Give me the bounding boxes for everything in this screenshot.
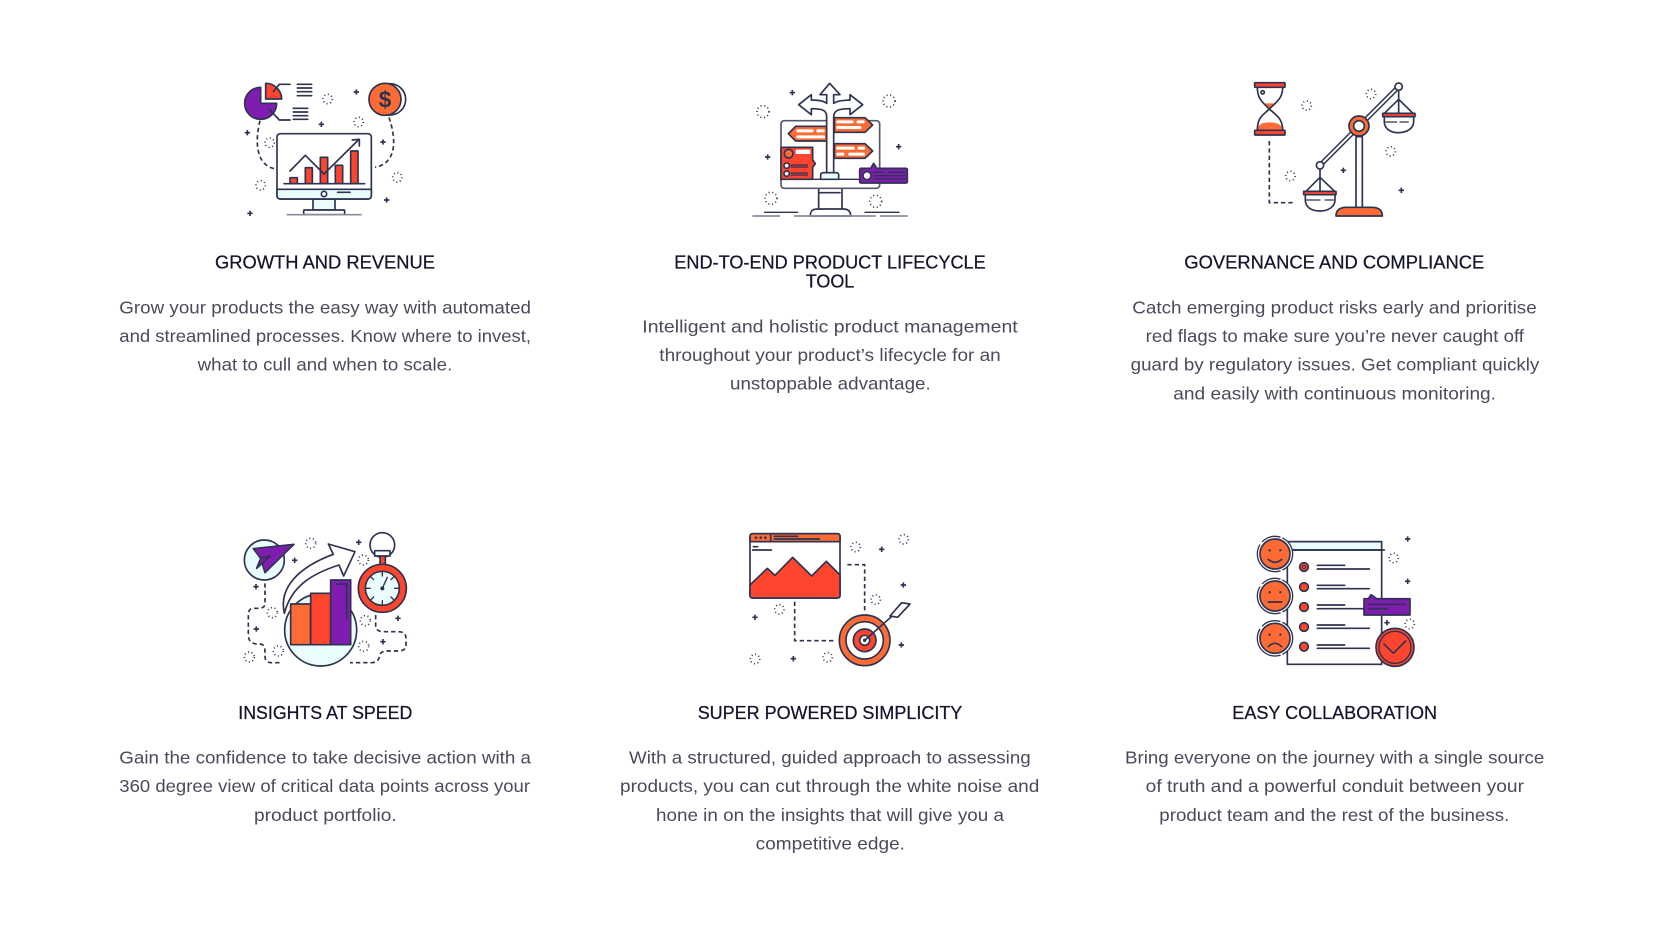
hourglass bbox=[1255, 83, 1285, 135]
body text: and streamlined processes. Know where to invest, bbox=[119, 326, 531, 346]
neutral face bbox=[1257, 578, 1293, 614]
body text: unstoppable advantage. bbox=[730, 374, 931, 394]
body text: Catch emerging product risks early and prioritise bbox=[1132, 297, 1537, 317]
heading: SUPER POWERED SIMPLICITY bbox=[698, 703, 962, 723]
icon: monitor with signpost bbox=[752, 83, 908, 216]
stopwatch bbox=[358, 533, 406, 612]
body text: and easily with continuous monitoring. bbox=[1173, 384, 1496, 404]
body text: competitive edge. bbox=[756, 834, 905, 854]
heading: GROWTH AND REVENUE bbox=[215, 252, 435, 272]
monitor bbox=[752, 121, 908, 216]
monitor bbox=[277, 134, 371, 215]
check badge bbox=[1376, 628, 1414, 666]
heading: INSIGHTS AT SPEED bbox=[238, 703, 412, 723]
balance scale bbox=[1304, 83, 1415, 216]
body text bbox=[1131, 297, 1540, 404]
heading: EASY COLLABORATION bbox=[1232, 703, 1437, 723]
body text: hone in on the insights that will give you a bbox=[656, 805, 1004, 825]
panel: super powered simplicity bbox=[620, 534, 1039, 854]
body text: Bring everyone on the journey with a single source bbox=[1125, 747, 1544, 767]
body text bbox=[620, 747, 1039, 854]
profile card bbox=[781, 147, 815, 179]
chat bubble bbox=[860, 163, 907, 183]
panel: end-to-end product lifecycle tool bbox=[642, 83, 1018, 394]
target and arrow bbox=[839, 603, 910, 666]
sad face bbox=[1257, 621, 1293, 656]
panel: easy collaboration bbox=[1125, 536, 1544, 825]
body text: Grow your products the easy way with automated bbox=[119, 297, 531, 317]
panel: growth and revenue bbox=[119, 83, 531, 375]
heading: TOOL bbox=[806, 271, 854, 291]
body text bbox=[642, 316, 1018, 394]
body text: products, you can cut through the white noise and bbox=[620, 776, 1039, 796]
browser window bbox=[750, 534, 840, 598]
body text: of truth and a powerful conduit between your bbox=[1146, 776, 1524, 796]
body text: guard by regulatory issues. Get compliant quickly bbox=[1131, 355, 1540, 375]
body text bbox=[119, 297, 531, 375]
body text: product portfolio. bbox=[254, 805, 397, 825]
icon: monitor with growth chart, pie and coin bbox=[245, 83, 406, 216]
paper plane badge bbox=[244, 540, 294, 580]
body text: With a structured, guided approach to assessing bbox=[629, 747, 1031, 767]
icon: bars, paper plane and stopwatch bbox=[244, 533, 406, 666]
body text bbox=[1125, 747, 1544, 825]
body text: red flags to make sure you’re never caught off bbox=[1146, 326, 1524, 346]
body text: product team and the rest of the business. bbox=[1159, 805, 1509, 825]
direction signs bbox=[788, 118, 873, 158]
icon: dollar coin: $ bbox=[379, 86, 392, 112]
icon: hourglass and scales bbox=[1255, 83, 1415, 216]
bar chart with arrow bbox=[283, 544, 357, 666]
icon: dollar coin bbox=[369, 83, 406, 115]
chat bubble bbox=[1364, 595, 1410, 615]
body text: Intelligent and holistic product management bbox=[642, 316, 1018, 336]
signpost arrows bbox=[799, 83, 863, 173]
body text: Gain the confidence to take decisive action with a bbox=[119, 747, 531, 767]
panel: governance and compliance bbox=[1131, 83, 1540, 404]
body text: what to cull and when to scale. bbox=[197, 355, 452, 375]
heading: GOVERNANCE AND COMPLIANCE bbox=[1184, 252, 1484, 272]
icon: browser window and target bbox=[750, 534, 910, 666]
heading: END-TO-END PRODUCT LIFECYCLE bbox=[674, 252, 986, 272]
panel: insights at speed bbox=[119, 533, 531, 825]
bar and line chart bbox=[284, 139, 365, 184]
body text: throughout your product’s lifecycle for an bbox=[659, 345, 1001, 365]
happy face bbox=[1257, 536, 1293, 572]
checklist page bbox=[1287, 542, 1384, 664]
body text: 360 degree view of critical data points across your bbox=[119, 776, 530, 796]
pie chart bbox=[245, 83, 312, 120]
icon: feedback checklist bbox=[1257, 536, 1414, 666]
body text bbox=[119, 747, 531, 825]
heading bbox=[674, 252, 986, 291]
